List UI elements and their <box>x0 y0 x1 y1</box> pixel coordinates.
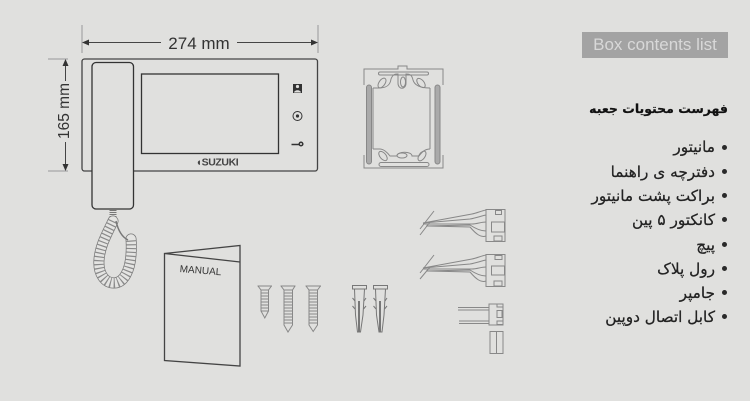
handset <box>92 62 134 209</box>
monitor screen <box>142 74 278 154</box>
screw 3 <box>306 286 321 332</box>
screws <box>258 286 321 332</box>
height dimension: 165 mm: 165 mm <box>56 83 73 139</box>
jumper <box>490 332 503 354</box>
item: screws <box>696 236 727 254</box>
item: monitor: مانیتور <box>673 138 715 156</box>
item: manual: دفترچه ی راهنما <box>611 163 715 181</box>
wall bracket <box>364 66 443 168</box>
box contents label: Box contents list <box>593 35 717 54</box>
contents list <box>590 138 727 326</box>
item: jumper: جامپر <box>680 284 715 302</box>
monitor <box>82 59 318 171</box>
5-pin connector 1 <box>420 210 505 242</box>
icon: photo button <box>293 84 302 93</box>
list heading: فهرست محتویات جعبه <box>589 101 728 116</box>
width dimension: 274 mm <box>82 25 318 53</box>
screw 2 <box>280 286 296 332</box>
icon: door key button <box>292 142 303 146</box>
item: wall plugs: رول پلاک <box>657 260 715 278</box>
manual booklet <box>164 246 240 366</box>
item: connector: کانکتور ۵ پین <box>632 211 715 229</box>
manual label: MANUAL <box>179 264 222 278</box>
item: bracket: براکت پشت مانیتور <box>591 187 715 205</box>
plug 1 <box>352 286 366 332</box>
width dimension: 274 mm: 274 mm <box>168 34 230 53</box>
icon: talk button <box>293 112 302 120</box>
5-pin connector 2 <box>420 254 505 286</box>
box contents label <box>582 32 728 58</box>
item: screws: پیچ <box>696 236 715 254</box>
two-pin cable <box>458 304 503 325</box>
item: two-pin cable: کابل اتصال دوپین <box>605 308 715 326</box>
height dimension: 165 mm <box>48 59 73 171</box>
plug 2 <box>374 286 388 332</box>
coiled cord <box>99 210 131 283</box>
screw 1 <box>258 286 272 318</box>
monitor body <box>82 59 318 171</box>
wall plugs <box>352 286 388 332</box>
suzuki logo: ◖SUZUKI <box>196 156 239 168</box>
